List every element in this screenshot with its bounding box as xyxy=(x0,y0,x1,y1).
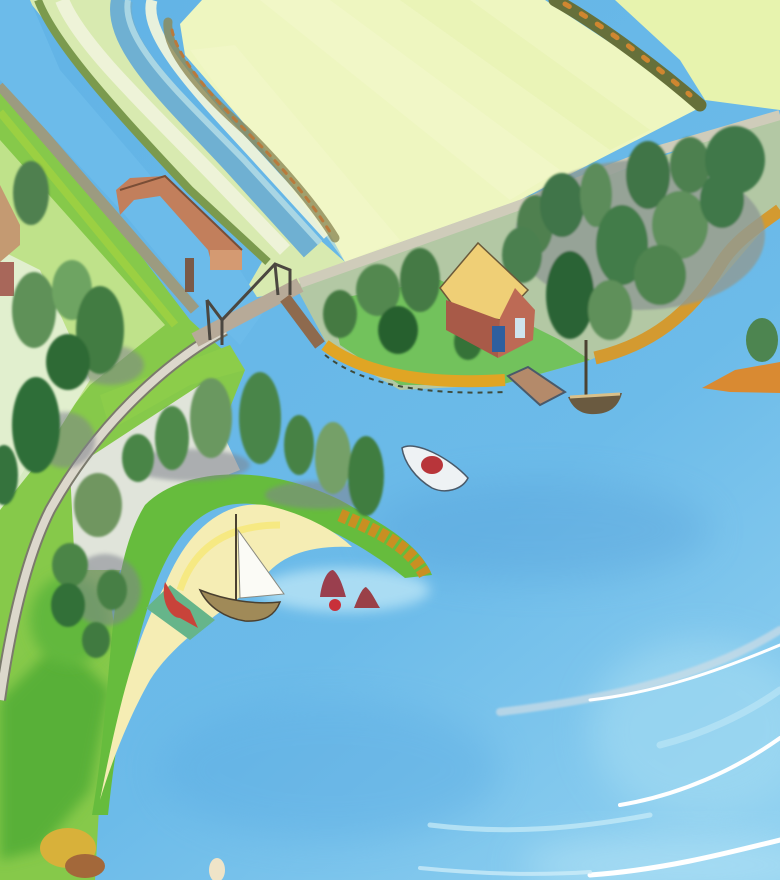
road: diagonal dyke xyxy=(0,85,195,310)
north shore reeds xyxy=(325,210,780,393)
water ripples xyxy=(420,630,780,875)
curved road surface xyxy=(0,330,225,700)
left canal water xyxy=(0,0,265,345)
curved road xyxy=(0,330,225,700)
lower-left green land xyxy=(0,90,245,880)
upper right field xyxy=(615,0,780,110)
swimmers xyxy=(320,570,380,611)
field road xyxy=(300,115,780,283)
south buoy figure xyxy=(209,858,225,880)
south reeds xyxy=(40,828,105,878)
moored sailboat xyxy=(568,340,622,414)
motorboat xyxy=(402,446,468,491)
right island xyxy=(702,318,780,393)
green bank around beach xyxy=(92,474,432,815)
north shore land xyxy=(295,115,780,390)
north shore greenery xyxy=(330,280,590,385)
lock quay xyxy=(285,298,320,345)
grass strip along left canal xyxy=(0,112,175,325)
house at left edge xyxy=(0,185,20,296)
sandy beach xyxy=(100,505,352,800)
bridge deck xyxy=(195,285,300,340)
bank land between the canals xyxy=(28,0,345,300)
beach highlight xyxy=(180,525,280,590)
trees: left grove xyxy=(0,161,154,658)
beach reeds xyxy=(340,515,425,575)
trees: left grove shadows xyxy=(35,345,375,626)
house xyxy=(440,243,535,358)
trees: right grove xyxy=(502,126,765,340)
picnic blanket with people xyxy=(146,582,215,640)
bridge frame xyxy=(207,264,290,345)
jetty xyxy=(508,367,565,405)
beach sailboat xyxy=(200,514,284,621)
main field xyxy=(180,0,705,262)
upper canal xyxy=(121,0,328,250)
trees: house grove xyxy=(323,248,482,360)
hedge along field xyxy=(168,0,700,238)
trees: beach row xyxy=(155,372,384,516)
wooden lock xyxy=(116,176,242,292)
